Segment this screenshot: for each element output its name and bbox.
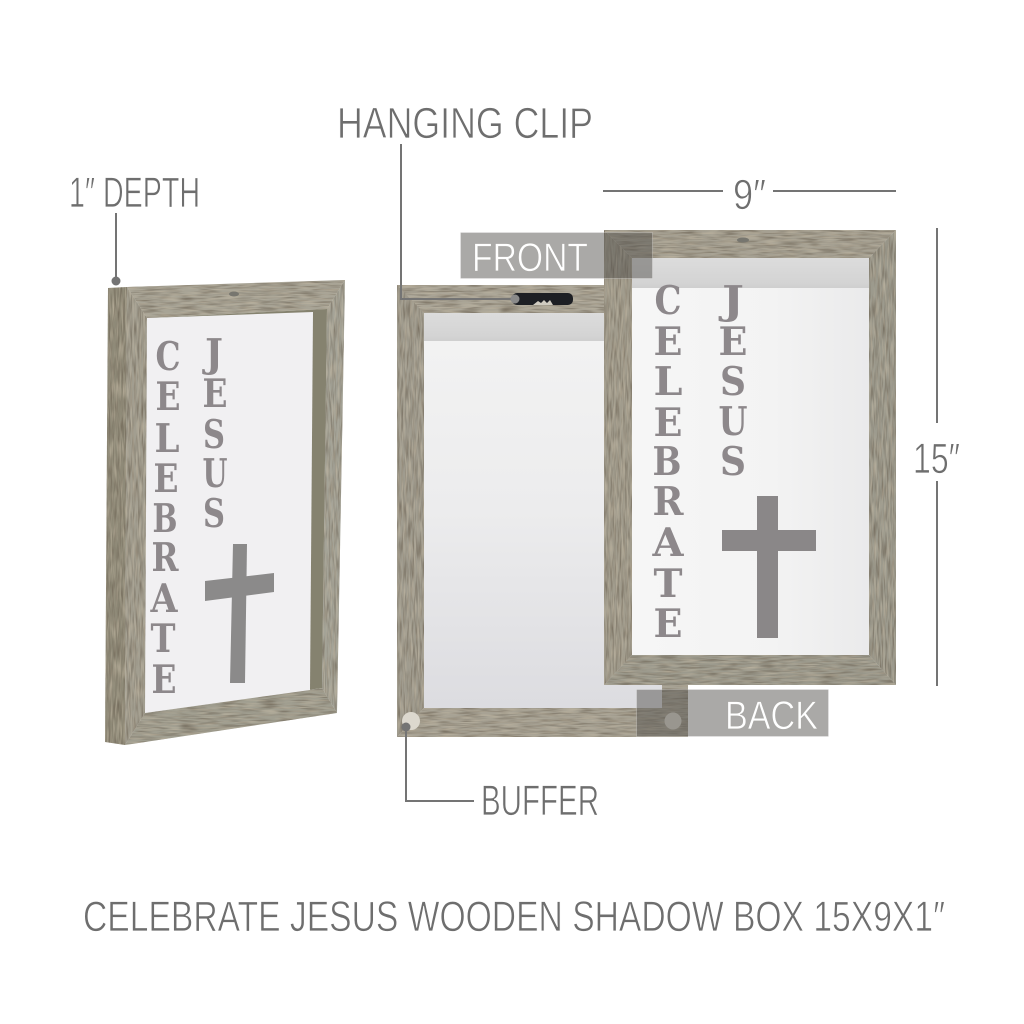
right frame: front view	[604, 230, 896, 685]
sign lettering: JESUS	[202, 331, 228, 537]
icon: frame knot	[229, 292, 239, 296]
sign lettering: JESUS	[718, 278, 748, 485]
sign lettering: CELEBRATE: E	[152, 657, 176, 703]
back panel	[424, 313, 664, 708]
sign lettering: CELEBRATE: C	[654, 278, 682, 324]
sign lettering: CELEBRATE: T	[654, 561, 682, 607]
icon: buffer right	[664, 712, 682, 730]
sign lettering: CELEBRATE	[150, 334, 180, 703]
sign lettering: CELEBRATE: L	[654, 359, 682, 405]
label: FRONT: FRONT	[472, 236, 588, 280]
sign lettering: JESUS: E	[202, 371, 228, 417]
sign lettering: CELEBRATE: E	[156, 374, 180, 420]
sign lettering: JESUS: J	[202, 331, 223, 377]
sign lettering: JESUS: E	[718, 319, 748, 365]
sign lettering: CELEBRATE: L	[154, 416, 180, 462]
sign lettering: JESUS: U	[718, 399, 748, 445]
frame left rail	[397, 285, 424, 737]
sign lettering: JESUS: S	[720, 439, 746, 485]
cross	[205, 544, 274, 683]
sign lettering: JESUS: S	[720, 359, 746, 405]
white inner panel	[145, 312, 313, 713]
inner side shadow	[145, 309, 327, 713]
sign lettering: CELEBRATE: A	[651, 520, 684, 566]
sign lettering: CELEBRATE: B	[152, 496, 178, 542]
sign lettering: CELEBRATE: E	[654, 601, 682, 647]
middle frame: back view	[397, 285, 688, 737]
sign lettering: CELEBRATE: A	[150, 576, 178, 622]
cross	[722, 496, 816, 638]
callout: 1 inch depth: 1″ DEPTH	[69, 169, 200, 217]
callout: buffer	[402, 722, 599, 825]
icon: hanging clip	[512, 293, 573, 305]
frame rails	[604, 230, 896, 685]
label: BACK: BACK	[725, 694, 818, 738]
sign lettering: CELEBRATE: B	[652, 439, 682, 485]
sign lettering: JESUS: S	[203, 412, 225, 458]
frame top rail	[397, 285, 607, 313]
sign lettering: JESUS: U	[202, 451, 228, 497]
callout: hanging clip: HANGING CLIP	[337, 99, 593, 148]
sign lettering: CELEBRATE: E	[654, 400, 682, 446]
frame front face	[125, 280, 345, 745]
dimension: width 9 inches: 9″	[733, 171, 766, 219]
frame side face showing depth	[105, 287, 127, 745]
icon: frame knot	[737, 238, 749, 242]
sign lettering: CELEBRATE: R	[152, 535, 179, 581]
callout: 1 inch depth	[69, 169, 200, 286]
label: FRONT	[460, 232, 652, 280]
white inner panel	[632, 258, 869, 655]
sign lettering: JESUS: J	[718, 278, 744, 324]
sign lettering: CELEBRATE: E	[654, 319, 682, 365]
callout: buffer: BUFFER	[481, 777, 599, 825]
hanging clip shadow on panel	[424, 313, 604, 341]
sign lettering: CELEBRATE: R	[652, 479, 684, 525]
sign lettering: JESUS: S	[203, 491, 225, 537]
dimension: height 15 inches: 15″	[913, 435, 960, 483]
frame bottom rail	[397, 683, 688, 737]
left frame: angled view	[105, 280, 345, 745]
callout: hanging clip	[337, 99, 593, 304]
sign lettering: CELEBRATE: T	[150, 616, 176, 662]
sign lettering: CELEBRATE	[651, 278, 684, 647]
sign lettering: CELEBRATE: E	[154, 456, 178, 502]
icon: buffer left	[402, 712, 420, 730]
sign lettering: CELEBRATE: C	[156, 334, 180, 380]
top shadow on panel	[632, 258, 869, 288]
label: BACK	[636, 690, 828, 738]
